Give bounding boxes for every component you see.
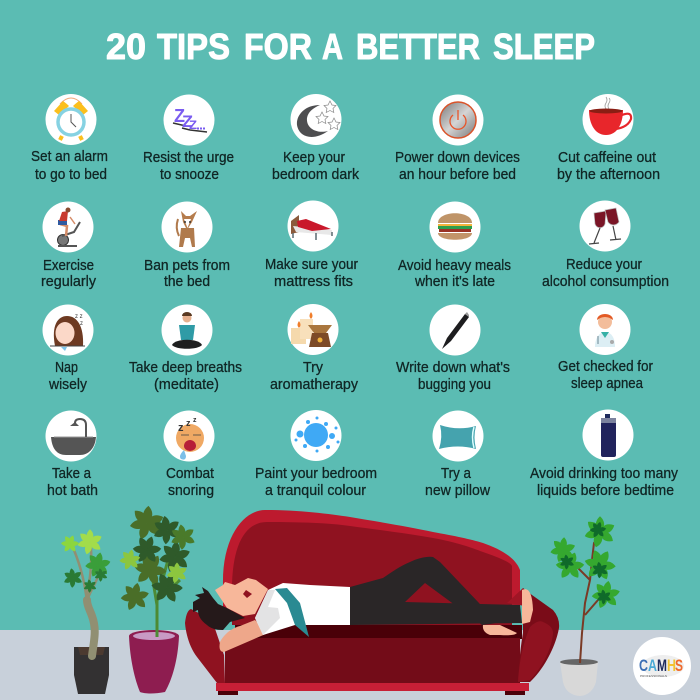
logo: CAMHS: H [667,656,676,675]
tip labels: Avoid heavy meals [398,257,511,274]
title: 20 [106,26,146,67]
tip labels: snoring [168,482,214,499]
tip labels: aromatherapy [270,376,358,393]
tip labels: new pillow [425,482,490,499]
icon: napping girl: z [80,321,83,327]
sofa [185,510,559,695]
tip labels: Set an alarm [31,148,108,165]
icon: snoring face: z [186,418,191,428]
man: back arm [220,620,268,652]
icon: exercise bike [58,208,80,246]
tip labels: Resist the urge [143,149,234,166]
tip labels: Exercise [43,257,94,274]
tip labels: sleep apnea [571,375,644,392]
tip labels: a tranquil colour [265,482,366,499]
icon: pen [442,312,469,349]
tip labels: hot bath [47,482,98,499]
title: TIPS [157,26,230,67]
icon: burger [438,213,472,240]
tip labels: liquids before bedtime [537,482,674,499]
icon: pillow [439,425,476,449]
icon: meditating person [172,312,202,349]
icon: snoring face: z [178,422,184,434]
icon: coffee cup [589,97,631,135]
logo: CAMHS: PROFESSIONALS [640,674,667,678]
icon: bed [291,215,332,240]
man: hair [193,587,245,630]
icon: doctor [595,314,615,347]
tip labels: regularly [41,273,96,290]
sleeping man [193,557,533,652]
tip labels: (meditate) [154,376,219,393]
tip labels: Power down devices [395,149,520,166]
tip circles [42,94,634,462]
tip labels: bedroom dark [272,166,359,183]
man: trousers [350,557,522,625]
icon: zzz: Z [174,106,185,126]
icon: aromatherapy candles [291,312,332,347]
tip labels: Get checked for [558,358,653,375]
logo: CAMHS: C [639,656,648,675]
man: head and neck [215,578,268,616]
tip labels: Write down what's [396,359,510,376]
icon: napping girl: z z [75,314,83,320]
icon: wine glasses [589,208,621,244]
tip labels: bugging you [418,376,491,393]
man: tie [275,588,309,637]
icon: moon and stars [297,101,340,137]
tip labels: when it's late [414,273,495,290]
tip labels: to go to bed [35,166,107,183]
floor [0,630,700,700]
title: BETTER [356,26,480,67]
logo: CAMHS: M [657,656,667,675]
icon: bathtub [51,419,96,455]
logo: CAMHS [633,637,691,695]
man: shirt [255,583,350,635]
title: SLEEP [493,26,595,67]
title [106,26,595,67]
man: foot flat [483,625,517,635]
icon: water bottle [601,414,616,457]
plant: left tree in black pot [57,527,115,694]
tip labels: Combat [166,465,215,482]
icon: napping girl [50,314,85,351]
logo: CAMHS: S [675,656,683,675]
tip labels: the bed [164,273,210,290]
icon: zzz: Z [189,118,197,132]
tip labels: Nap [55,359,78,376]
icon: zzz: Z [182,112,193,131]
icon: alarm clock [54,98,88,140]
icon: blue paint splash [294,416,340,452]
tip labels: Take a [52,465,92,482]
icon: dog [177,211,197,247]
tip labels: Keep your [283,149,345,166]
title: FOR [244,26,312,67]
plant: tall plant in purple pot [116,501,196,694]
icon: zzz [173,106,207,132]
tip labels: Ban pets from [144,257,230,274]
tip labels [31,148,678,499]
plant: right tree in white pot [547,513,625,696]
tip labels: Take deep breaths [129,359,242,376]
tip labels: Cut caffeine out [558,149,657,166]
tip labels: alcohol consumption [542,273,669,290]
icon: snoring face: z [193,417,197,424]
tip labels: wisely [48,376,87,393]
title: A [322,26,343,67]
man: foot upright [522,589,533,624]
tip labels: Reduce your [566,256,642,273]
tip labels: an hour before bed [399,166,516,183]
logo: CAMHS: A [648,656,657,675]
tip labels: Avoid drinking too many [530,465,678,482]
tip labels: Paint your bedroom [255,465,377,482]
tip labels: Try a [441,465,472,482]
icon: power button [440,102,476,138]
tip labels: by the afternoon [557,166,660,183]
icon: snoring face [176,417,204,460]
man: sleeve [255,590,280,635]
tip labels: Make sure your [265,256,358,273]
tip labels: Try [303,359,323,376]
tip labels: mattress fits [274,273,353,290]
tip labels: to snooze [160,166,219,183]
